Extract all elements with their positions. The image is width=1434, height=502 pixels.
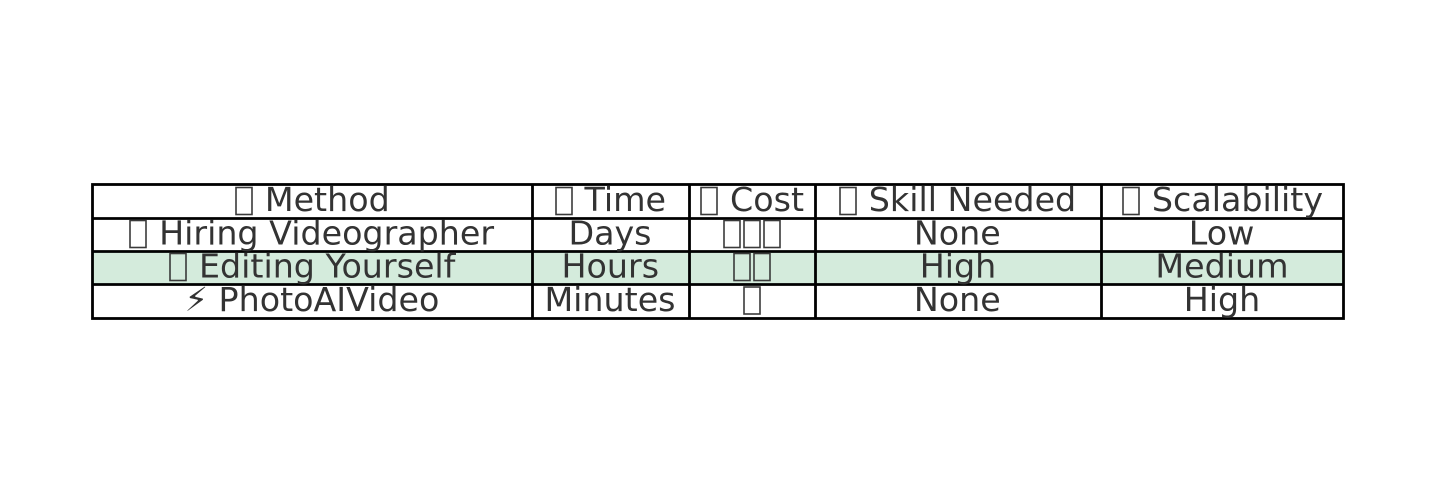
highlighted row background: Editing Yourself [92, 251, 1343, 284]
skill cell: None: None [914, 280, 1001, 319]
scalability cell: High: High [1184, 280, 1260, 319]
skill cell: None: None [914, 213, 1001, 252]
header: Skill Needed: Skill Needed [869, 180, 1076, 219]
method cell: PhotoAIVideo: ⚡ PhotoAIVideo [185, 280, 439, 319]
row: Hiring Videographer [130, 213, 1254, 252]
skill cell: High: High [920, 246, 996, 286]
cost cell: three symbols [724, 220, 780, 248]
scalability cell: Low: Low [1189, 213, 1254, 252]
header: Time: Time [584, 180, 666, 219]
scalability cell: Medium: Medium [1155, 246, 1289, 286]
row: PhotoAIVideo [185, 280, 1260, 319]
cost cell: one symbol [744, 287, 760, 314]
time cell: Hours: Hours [562, 246, 659, 286]
time cell: Days: Days [568, 213, 652, 252]
method cell: Editing Yourself: Editing Yourself [199, 246, 457, 286]
header: Scalability: Scalability [1152, 180, 1323, 219]
row: Editing Yourself [170, 246, 1289, 286]
cost cell: two symbols [734, 254, 770, 280]
method cell: Hiring Videographer: Hiring Videographer [159, 213, 494, 252]
header: Method: Method [265, 180, 390, 219]
time cell: Minutes: Minutes [544, 280, 676, 319]
header: Cost: Cost [730, 180, 804, 219]
table grid [92, 184, 1344, 318]
header row [236, 180, 1323, 219]
